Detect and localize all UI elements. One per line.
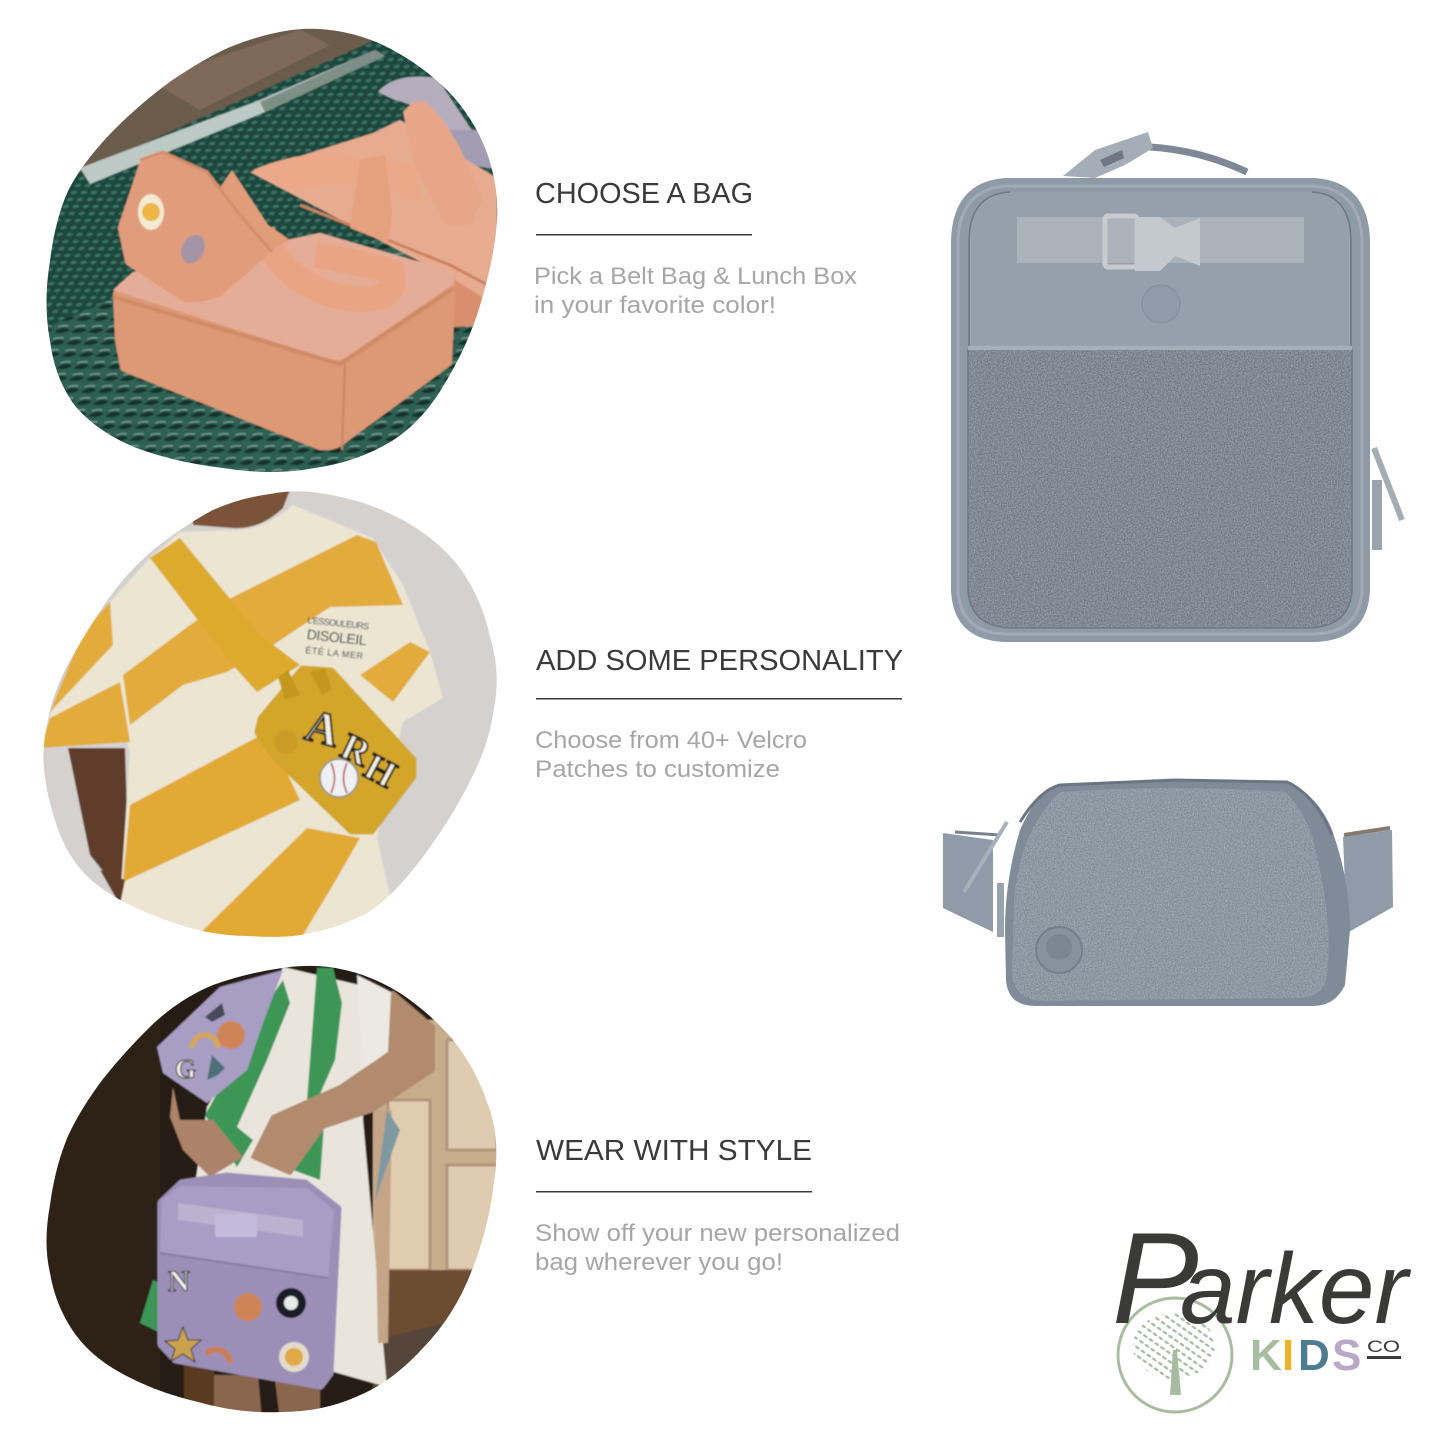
patches ARH: R (334, 725, 377, 775)
logo: Parker Kids Co: S (1332, 1331, 1361, 1380)
tan strap (373, 1110, 392, 1343)
logo: Parker Kids Co: P (1112, 1205, 1199, 1351)
text: add some personality description: Choose from 40+ Velcro (535, 727, 807, 754)
logo: Parker Kids Co: arker (1180, 1233, 1412, 1345)
dress (195, 967, 388, 1386)
legs (213, 1374, 321, 1412)
text: choose a bag description: in your favorite color! (534, 292, 776, 319)
neck (192, 492, 290, 529)
logo: Parker Kids Co: I (1282, 1331, 1294, 1380)
bag strap (150, 538, 300, 692)
front lunch box (118, 238, 450, 445)
patches ARH (302, 711, 400, 790)
arm (67, 747, 128, 880)
lavender lunch box (162, 1177, 337, 1385)
text: wear with style description: bag wherever you go! (535, 1249, 783, 1276)
photo: child holding lavender lunch box and belt bag: N (168, 1265, 190, 1298)
tee print text: DISOLEIL (306, 626, 368, 648)
heading: choose a bag: CHOOSE A BAG (535, 178, 753, 210)
text: wear with style description: Show off your new personalized (535, 1220, 900, 1247)
text: choose a bag description: Pick a Belt Bag & Lunch Box (534, 263, 857, 290)
photo: child holding lavender lunch box and belt bag: G (175, 1054, 196, 1084)
text: add some personality description: Patches to customize (535, 756, 780, 783)
text: add some personality description (535, 727, 807, 783)
tee print text: ÉTÉ LA MER (305, 645, 364, 661)
back belt bag and strap (252, 155, 300, 172)
icon: baseball patch (320, 759, 358, 797)
chest strap and buckle (1017, 216, 1304, 271)
right arm (253, 993, 433, 1173)
patches ARH: H (357, 746, 403, 797)
photo: child holding lavender lunch box and belt bag (40, 960, 503, 1425)
front belt bag (123, 158, 264, 297)
purple strap top right (377, 75, 472, 131)
text: wear with style description (535, 1220, 900, 1276)
wooden doors (373, 1020, 503, 1285)
yellow stripes (123, 535, 403, 725)
logo: Parker Kids Co: K (1250, 1331, 1282, 1380)
logo: Parker Kids Co: CO (1367, 1337, 1400, 1356)
logo: Parker Kids Co: D (1298, 1331, 1330, 1380)
front satin strap (262, 232, 393, 299)
icon: tree (1133, 1313, 1215, 1395)
product: gray belt bag (943, 780, 1393, 1006)
tee print text (304, 615, 370, 661)
text: choose a bag description (534, 263, 857, 319)
icon: sun patch (138, 194, 164, 230)
lavender belt bag (157, 970, 283, 1103)
left arm (170, 1087, 243, 1177)
tee print text: L'ESSOULEURS (307, 615, 370, 631)
logo: Parker Kids Co (1112, 1205, 1412, 1412)
tee (40, 505, 443, 940)
back lunch box (250, 120, 497, 327)
patches ARH: A (300, 699, 346, 757)
heading: wear with style: WEAR WITH STYLE (536, 1135, 812, 1167)
zipper pulls (1374, 448, 1402, 520)
photo: peach belt bag and lunch box on green mesh table (46, 28, 498, 472)
photo: child in striped tee with yellow belt bag (40, 485, 500, 940)
heading: add some personality: ADD SOME PERSONALITY (536, 645, 903, 677)
product: gray lunch box (951, 132, 1402, 642)
yellow bag (259, 670, 412, 830)
icon: heart patch (180, 234, 206, 264)
